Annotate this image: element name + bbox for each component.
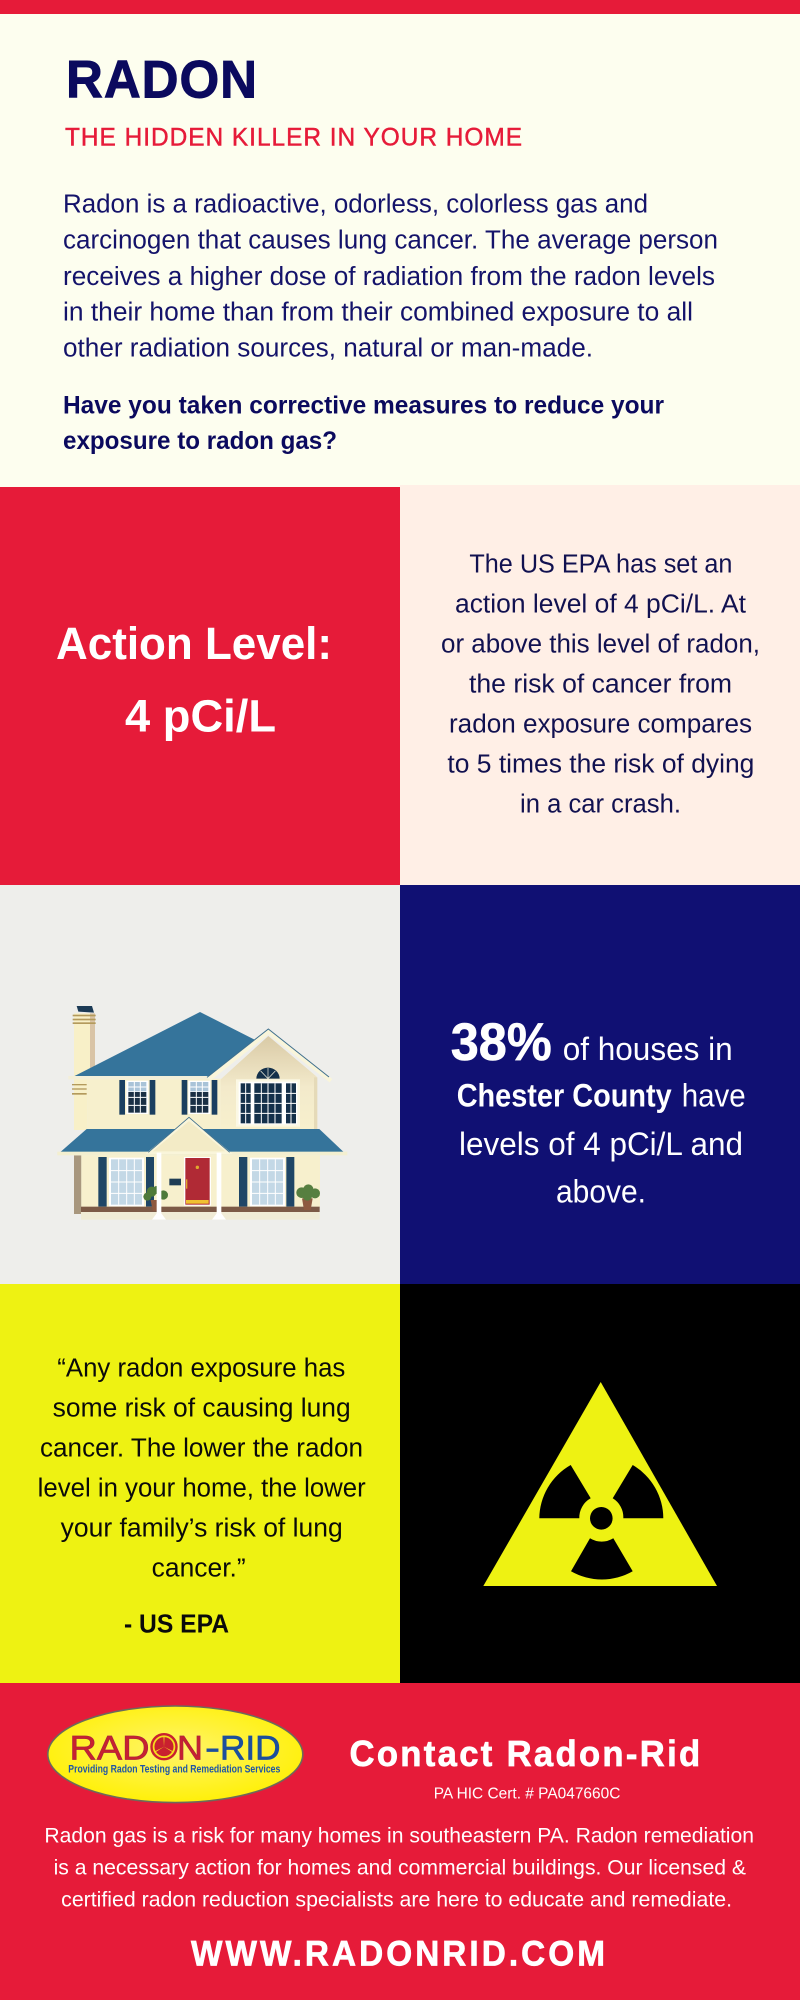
intro paragraph: receives a higher dose of radiation from the radon levels: [63, 263, 715, 291]
logo: Radon-Rid: RID: [220, 1729, 280, 1767]
explanation text: the risk of cancer from: [469, 670, 732, 698]
intro paragraph: Radon is a radioactive, odorless, colorless gas and: [63, 191, 648, 219]
statistic text: Chester County: [457, 1078, 672, 1114]
logo: Radon-Rid: -: [205, 1729, 220, 1767]
action level heading: 4 pCi/L: [125, 691, 276, 742]
panel: contact footer: [0, 1683, 800, 2000]
intro paragraph: in their home than from their combined exposure to all: [63, 299, 693, 327]
logo: Radon-Rid: Providing Radon Testing and Remediation Services: [68, 1764, 280, 1776]
subtitle: THE HIDDEN KILLER IN YOUR HOME: [65, 124, 523, 152]
icon: house: [57, 1006, 347, 1220]
quote text: [38, 1355, 366, 1583]
panel: house illustration: [0, 885, 400, 1284]
icon: radiation trefoil triangle: [483, 1382, 717, 1586]
explanation text: or above this level of radon,: [441, 630, 760, 658]
contact paragraph: Radon gas is a risk for many homes in southeastern PA. Radon remediation: [44, 1824, 754, 1847]
logo: Radon-Rid: N: [177, 1729, 203, 1767]
panel: introduction: [0, 14, 800, 486]
statistic text: above.: [556, 1174, 646, 1210]
quote attribution: - US EPA: [124, 1611, 229, 1639]
contact heading: Contact Radon-Rid: [350, 1733, 702, 1774]
panel: Chester County statistic: [400, 885, 800, 1284]
quote text: some risk of causing lung: [53, 1395, 351, 1423]
panel: EPA action level explanation: [400, 485, 800, 885]
contact paragraph: [44, 1824, 754, 1912]
panel: radiation warning: [400, 1284, 800, 1683]
statistic text: levels of 4 pCi/L and: [459, 1126, 743, 1162]
quote text: level in your home, the lower: [38, 1475, 366, 1503]
contact paragraph: is a necessary action for homes and commercial buildings. Our licensed &: [54, 1856, 746, 1879]
action level heading: [56, 618, 332, 742]
panel: EPA quote: [0, 1284, 400, 1683]
statistic text: [451, 1013, 746, 1210]
explanation text: in a car crash.: [520, 790, 681, 818]
statistic text: of houses in: [563, 1031, 733, 1067]
contact paragraph: certified radon reduction specialists are here to educate and remediate.: [61, 1889, 732, 1912]
quote text: “Any radon exposure has: [57, 1355, 345, 1383]
certification number: PA HIC Cert. # PA047660C: [434, 1785, 620, 1802]
question: [63, 391, 664, 455]
quote text: cancer. The lower the radon: [40, 1435, 363, 1463]
question: Have you taken corrective measures to reduce your: [63, 391, 664, 419]
title: RADON: [66, 50, 258, 110]
intro paragraph: [63, 191, 718, 363]
explanation text: The US EPA has set an: [469, 550, 732, 578]
question: exposure to radon gas?: [63, 427, 337, 455]
explanation text: to 5 times the risk of dying: [447, 750, 754, 778]
explanation text: radon exposure compares: [449, 710, 752, 738]
intro paragraph: carcinogen that causes lung cancer. The average person: [63, 227, 718, 255]
explanation text: [441, 550, 760, 818]
explanation text: action level of 4 pCi/L. At: [455, 590, 746, 618]
intro paragraph: other radiation sources, natural or man-made.: [63, 335, 593, 363]
statistic text: 38%: [451, 1013, 552, 1072]
logo: Radon-Rid: RAD: [70, 1729, 150, 1767]
quote text: your family’s risk of lung: [61, 1515, 343, 1543]
action level heading: Action Level:: [56, 618, 332, 669]
panel: action level: [0, 487, 400, 885]
top bar: [0, 0, 800, 14]
logo: Radon-Rid: [48, 1706, 303, 1803]
quote text: cancer.”: [152, 1555, 246, 1583]
website: WWW.RADONRID.COM: [191, 1935, 608, 1974]
statistic text: have: [682, 1078, 746, 1114]
